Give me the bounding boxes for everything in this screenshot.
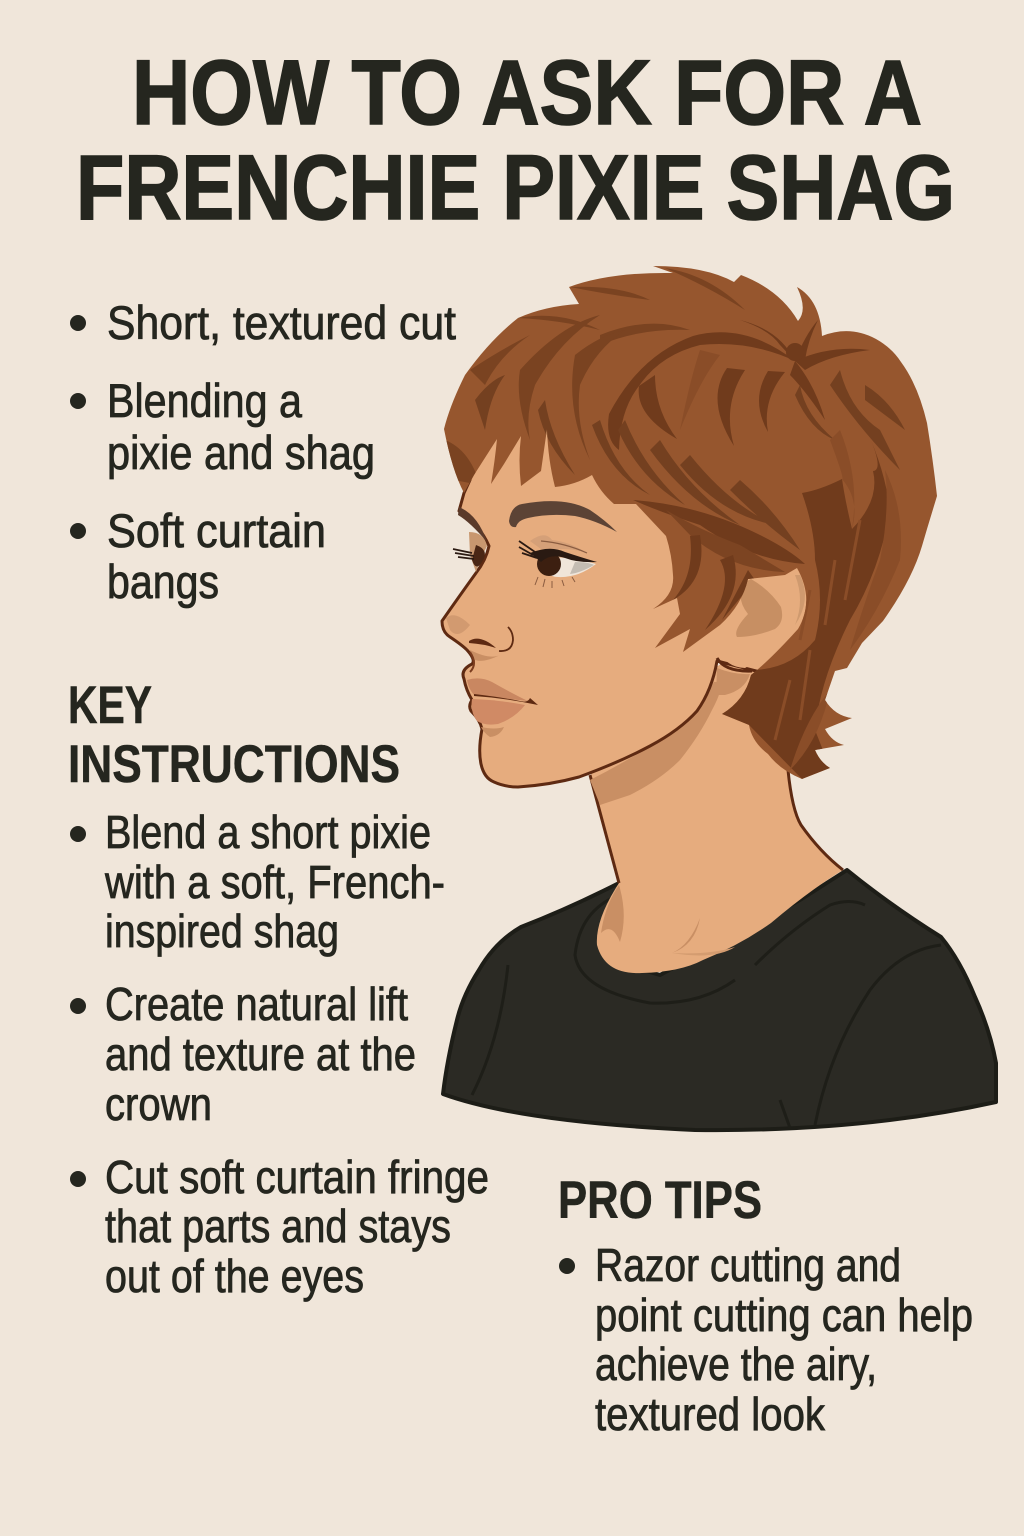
key instructions list: out of the eyes (105, 1250, 364, 1302)
hair silhouette (444, 266, 937, 779)
intro bullet list: Soft curtain (107, 504, 326, 557)
intro bullet list (70, 296, 456, 608)
shirt (443, 870, 996, 1130)
intro bullet list: bangs (107, 555, 219, 608)
key instructions list: Blend a short pixie (105, 806, 431, 858)
pro tips list: Razor cutting and (595, 1239, 901, 1291)
intro bullet list: Short, textured cut (107, 296, 456, 349)
heading: key instructions (68, 676, 400, 794)
hair (444, 266, 937, 779)
pro tips list: point cutting can help (595, 1289, 973, 1341)
lips (467, 678, 538, 737)
title (76, 42, 955, 239)
key instructions list: inspired shag (105, 905, 339, 957)
key instructions list: Cut soft curtain fringe (105, 1151, 489, 1203)
hair shadows and strands (445, 268, 905, 779)
key instructions list (70, 806, 489, 1302)
pro tips list: achieve the airy, (595, 1338, 877, 1390)
pro tips list (559, 1239, 973, 1440)
heading: key instructions: KEY (68, 676, 152, 735)
ear (717, 565, 809, 671)
intro bullet list: pixie and shag (107, 426, 375, 479)
heading: key instructions: INSTRUCTIONS (68, 735, 400, 794)
intro bullet list: Blending a (107, 374, 303, 427)
portrait illustration (442, 266, 996, 1130)
face (442, 400, 820, 787)
key instructions list: and texture at the (105, 1028, 416, 1080)
key instructions list: that parts and stays (105, 1200, 451, 1252)
key instructions list: with a soft, French- (104, 856, 445, 908)
key instructions list: Create natural lift (105, 978, 408, 1030)
heading: pro tips: PRO TIPS (558, 1171, 762, 1230)
pro tips list: textured look (595, 1388, 826, 1440)
title: HOW TO ASK FOR A (132, 42, 922, 144)
nose (446, 615, 513, 672)
eyebrow (509, 501, 617, 532)
far eye and brow (453, 507, 487, 572)
neck (590, 640, 843, 973)
eye (519, 535, 597, 588)
key instructions list: crown (105, 1078, 212, 1130)
